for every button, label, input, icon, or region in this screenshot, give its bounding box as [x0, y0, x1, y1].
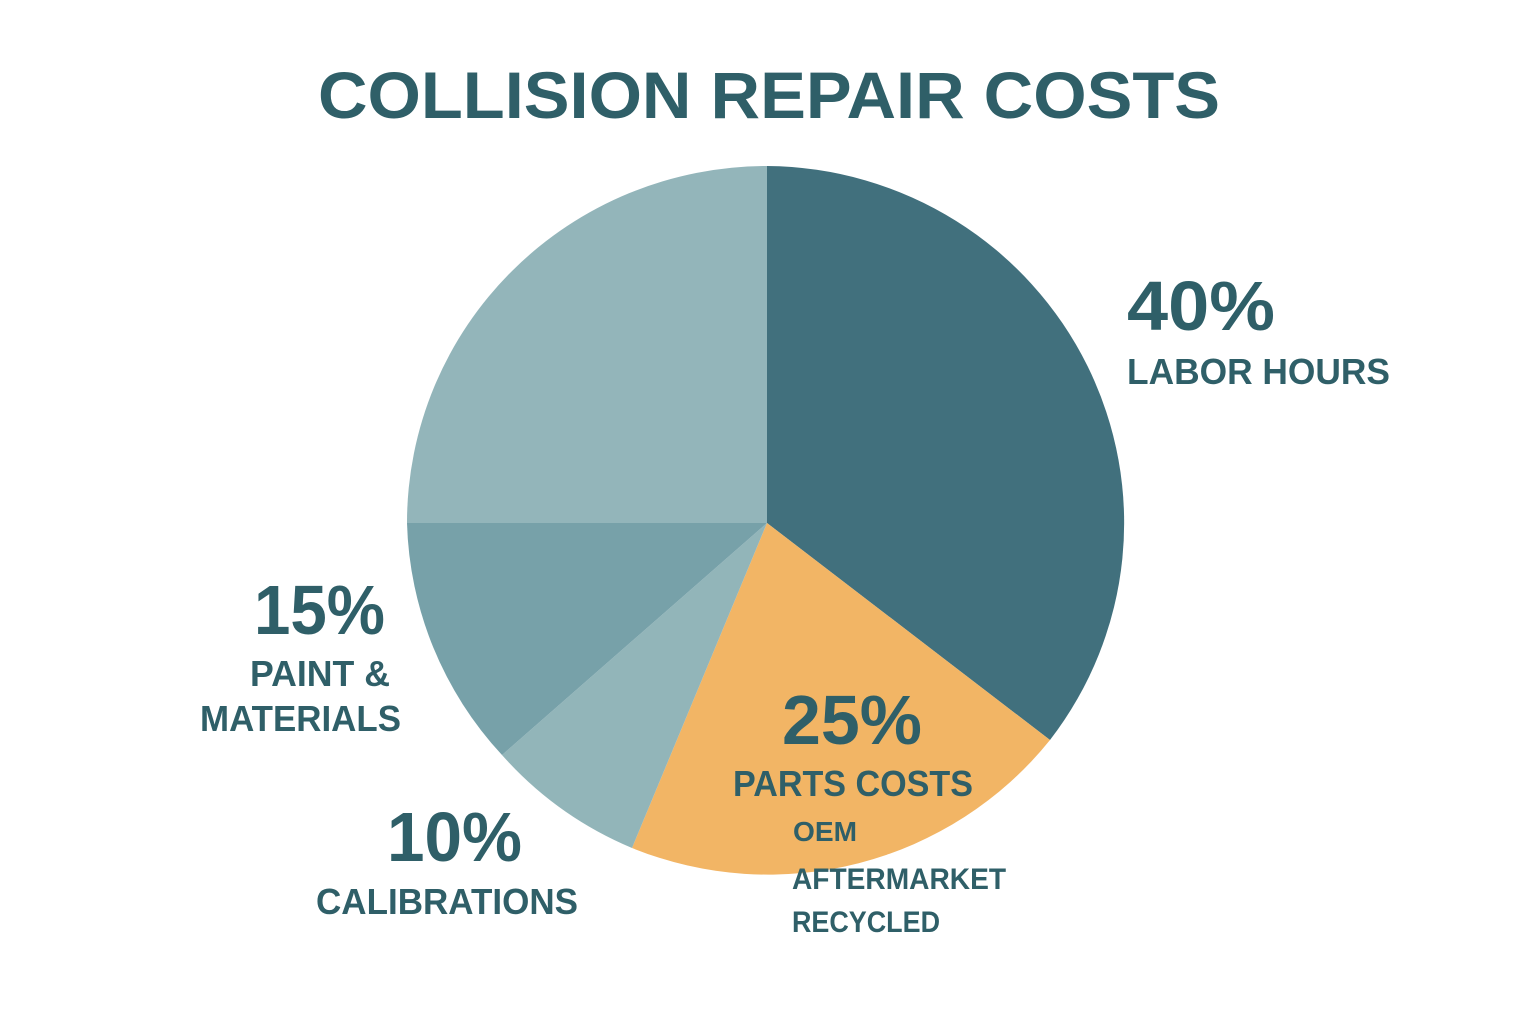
- label: labor hours: 40%: [1127, 267, 1275, 345]
- slice: paint & materials: [407, 523, 767, 755]
- label: calibrations: 10%: [387, 798, 522, 876]
- label: paint & materials: MATERIALS: [200, 698, 401, 739]
- label: calibrations: CALIBRATIONS: [316, 881, 578, 922]
- label: parts costs: RECYCLED: [792, 906, 940, 939]
- slice: parts costs: [632, 523, 1050, 875]
- slice: labor hours: [767, 166, 1124, 740]
- label: parts costs: PARTS COSTS: [733, 763, 973, 804]
- slice: calibrations: [502, 523, 767, 848]
- label: parts costs: OEM: [793, 816, 857, 847]
- label: parts costs: [733, 681, 1006, 939]
- label: labor hours: LABOR HOURS: [1127, 351, 1390, 392]
- label: parts costs: AFTERMARKET: [792, 863, 1006, 896]
- label: paint & materials: PAINT &: [250, 653, 390, 694]
- label: paint & materials: 15%: [254, 571, 385, 649]
- label: labor hours: [1127, 267, 1390, 392]
- label: calibrations: [316, 798, 578, 922]
- title: COLLISION REPAIR COSTS: [318, 58, 1220, 132]
- label: parts costs: 25%: [782, 681, 922, 759]
- pie chart: [407, 166, 1124, 875]
- label: paint & materials: [200, 571, 401, 739]
- slice: unlabeled remainder: [407, 166, 767, 523]
